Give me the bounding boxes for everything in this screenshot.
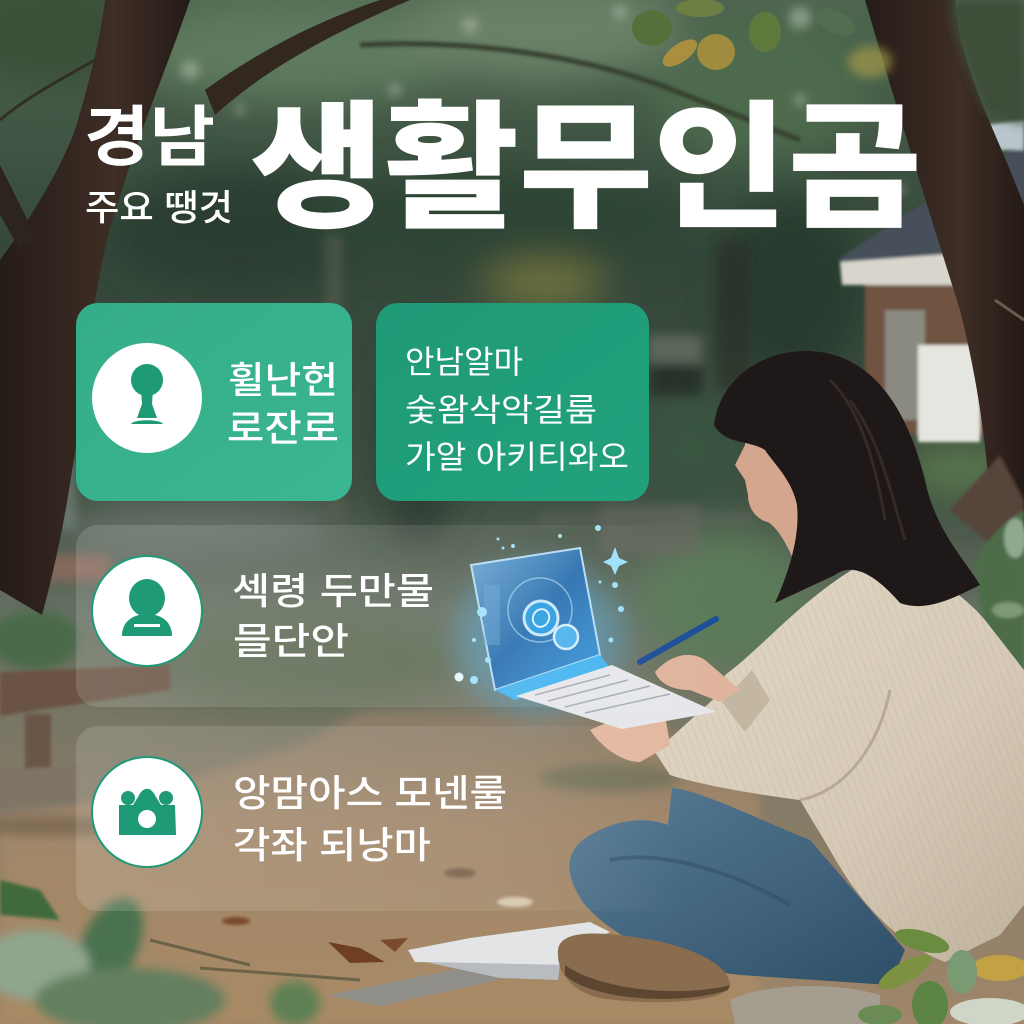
foreground: blurred leaves bottom left	[0, 880, 320, 1024]
jeans	[569, 788, 905, 985]
card two text	[405, 344, 629, 475]
neck and face	[735, 404, 820, 575]
hair	[714, 351, 980, 606]
tree: left trunk	[0, 0, 800, 615]
card one text	[227, 360, 339, 449]
foreground: leaves bottom right	[730, 924, 1024, 1024]
foliage: top right leaves	[632, 0, 1024, 125]
title: small heading: 주요 땡것	[85, 187, 233, 228]
sparkles	[454, 525, 628, 684]
card: green card two	[376, 303, 649, 501]
row 4 text: 앙맘아스 모넨룰	[233, 773, 507, 814]
laptop screen	[471, 548, 600, 690]
row 3 content	[92, 556, 434, 666]
row 3 text	[232, 571, 434, 662]
row 4 text	[233, 773, 507, 866]
card two text: 숯왐삭악길룸	[405, 392, 597, 428]
tree: right trunk	[865, 0, 1024, 545]
back hand	[590, 714, 670, 762]
panel: translucent row 3	[76, 525, 716, 707]
blurred bush and bench	[0, 555, 170, 820]
title: small heading: 경남	[84, 100, 215, 174]
card one text: 로잔로	[227, 408, 339, 449]
title: large heading: 생활무인곰	[250, 92, 922, 246]
house on the right	[840, 120, 1024, 442]
card one text: 휠난헌	[228, 360, 338, 401]
person: woman sitting with laptop	[558, 351, 1024, 1002]
icon: group of people	[92, 757, 202, 867]
row 3 text: 섹령 두만물	[232, 571, 434, 612]
icon: keyhole figure	[92, 343, 202, 453]
dappled light spots	[181, 5, 905, 195]
row 4 text: 각좌 되낭마	[233, 825, 431, 866]
card two text: 안남알마	[405, 344, 523, 380]
card two text: 가알 아키티와오	[405, 439, 629, 475]
writing hand	[655, 655, 740, 702]
blurred fence	[60, 235, 755, 555]
laptop with glowing hologram	[454, 525, 716, 729]
card: green card one	[76, 303, 352, 501]
laptop base	[495, 655, 610, 700]
shoe	[558, 934, 730, 1002]
foliage: right-hand bush	[975, 510, 1024, 800]
ground	[0, 712, 760, 1024]
icon: person	[92, 556, 202, 666]
pen	[640, 619, 716, 662]
sweater	[655, 562, 1024, 962]
title: small heading	[84, 100, 233, 228]
row 3 text: 믈단안	[233, 621, 349, 662]
paper keyboard	[516, 665, 716, 729]
notebook and papers on the ground	[328, 922, 610, 1006]
panel: translucent row 4	[76, 726, 686, 911]
row 4 content	[92, 757, 507, 867]
